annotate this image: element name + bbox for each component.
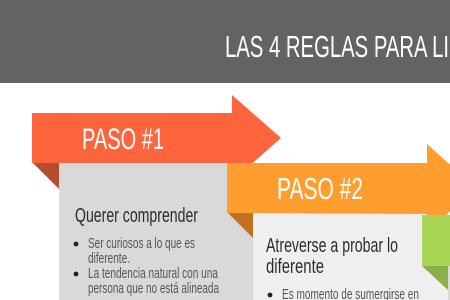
paso 2 heading: diferente [266,256,324,278]
paso 3 fold [422,266,448,290]
paso 2 arrow [227,144,450,232]
paso 1 heading: Querer comprender [75,205,198,227]
panel: paso 3 edge [448,266,450,300]
paso 1 bullet list: Ser curiosos a lo que es [88,235,195,252]
paso 1 fold [33,163,59,189]
paso 1 label: PASO #1 [82,123,164,156]
paso 2 label: PASO #2 [277,171,363,206]
paso 3 arrow [422,215,450,266]
panel: paso 1 [32,95,281,300]
paso 2 heading [266,235,398,278]
paso 2 heading: Atreverse a probar lo [266,235,398,257]
header band [0,0,450,83]
paso 2 fold [228,213,253,238]
paso 1 bullet list: persona que no está alineada [88,280,219,297]
paso 1 bullet list: diferente. [88,250,130,267]
paso 1 bullet list [74,235,219,297]
paso 1 arrow [32,95,281,181]
panel: paso 2 [227,144,450,300]
paso 1 bullet list: La tendencia natural con una [88,265,218,282]
